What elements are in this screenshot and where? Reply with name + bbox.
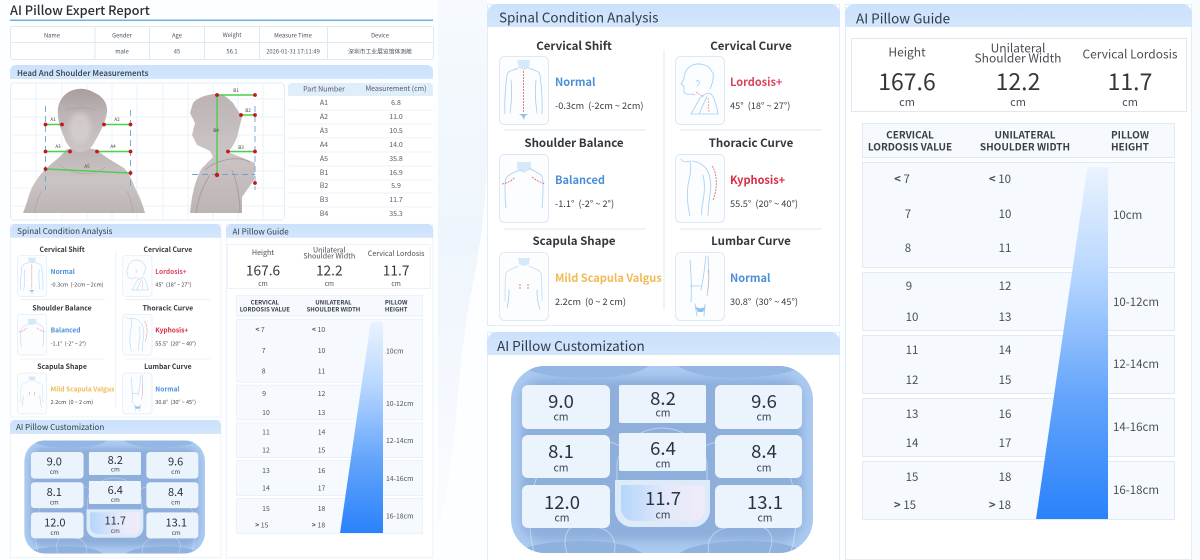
table: part measurements: 5.9 (391, 181, 401, 191)
panel: AI pillow guide, small: PILLOW (385, 297, 408, 307)
table: pillow height guide: 7 (905, 206, 911, 222)
panel: AI pillow customization, small: AI Pillow Customization (16, 422, 104, 433)
metric: scapula shape: Mild Scapula Valgus (555, 270, 662, 286)
summary: height, shoulder width, lordosis (852, 38, 1186, 112)
metric: scapula shape (500, 233, 662, 320)
panel: AI pillow guide, small: Shoulder Width (303, 251, 355, 261)
panel: AI pillow guide, small: 11 (318, 365, 326, 375)
panel: AI pillow guide, small: AI Pillow Guide (233, 227, 289, 238)
panel: AI pillow guide, small: 17 (318, 482, 326, 492)
table: pillow height guide: 13 (999, 309, 1011, 325)
table: part measurements: 35.8 (389, 154, 403, 164)
pillow diagram: cm (655, 456, 671, 472)
summary: height, shoulder width, lordosis: Unilateral (991, 40, 1045, 56)
panel: AI pillow guide, small: 12-14cm (386, 435, 413, 445)
panel: AI pillow guide, small: 11 (262, 427, 270, 437)
table: subject info: Name (44, 30, 60, 40)
panel: AI pillow guide, small: LORDOSIS VALUE (240, 305, 290, 314)
table: pillow height guide: 10-12cm (1113, 294, 1159, 310)
table: subject info: Gender (112, 30, 133, 40)
table: pillow height guide: 12 (906, 372, 918, 388)
table: pillow height guide: UNILATERAL (995, 126, 1056, 142)
panel: AI pillow customization, large (487, 332, 840, 560)
table: pillow height guide: 12 (999, 278, 1011, 294)
figure: side scan (190, 94, 255, 213)
panel: AI pillow customization, small: cm (50, 467, 59, 476)
panel: AI pillow guide, small: UNILATERAL (315, 297, 352, 307)
table: pillow height guide: > 15 (894, 497, 916, 513)
summary: height, shoulder width, lordosis: 167.6 (878, 63, 936, 97)
panel: AI pillow guide, small: 10-12cm (386, 398, 413, 408)
metric: cervical shift: Normal (555, 74, 596, 90)
pillow diagram: 13.1 (747, 489, 783, 515)
panel: AI pillow customization, small: 9.0 (47, 454, 62, 470)
table: part measurements: B4 (320, 209, 328, 219)
table: part measurements: 6.8 (391, 98, 401, 108)
table: subject info: Weight (223, 30, 242, 39)
panel: AI pillow customization, small: 13.1 (166, 515, 187, 531)
measurement lines: A1 (50, 117, 56, 123)
panel: AI pillow customization, small: 9.6 (168, 454, 183, 470)
summary: height, shoulder width, lordosis: cm (899, 94, 915, 110)
panel: AI pillow guide, small: Height (252, 248, 274, 258)
summary: height, shoulder width, lordosis: Cervical Lordosis (1082, 46, 1178, 62)
panel: AI pillow guide, small: Cervical Lordosis (368, 249, 425, 259)
panel: AI pillow customization, small: 8.1 (47, 484, 62, 500)
pillow diagram: 6.4 (650, 435, 676, 461)
panel: spinal condition analysis, small: Kyphosis+ (155, 325, 188, 335)
panel: AI pillow guide, small: 13 (262, 465, 270, 475)
metric: shoulder balance: Balanced (555, 172, 605, 188)
panel: AI pillow guide, small: SHOULDER WIDTH (307, 305, 360, 314)
panel: AI pillow customization, small: 6.4 (108, 482, 123, 498)
pillow diagram: cm (756, 410, 772, 424)
metric: cervical shift: Cervical Shift (536, 38, 612, 54)
panel: AI pillow guide, small: 14 (262, 482, 270, 492)
panel: AI pillow guide, small: 11.7 (383, 260, 409, 280)
panel: AI pillow guide, small: cm (258, 278, 268, 288)
table: pillow height guide: 10 (906, 309, 918, 325)
panel: AI pillow guide, small: 18 (318, 503, 326, 513)
panel: 3D scan grid (10, 83, 284, 220)
table: pillow height guide: < 10 (989, 171, 1011, 187)
metric: scapula shape: Scapula Shape (532, 233, 616, 249)
measurement lines: A5 (84, 164, 90, 170)
table: part measurements: A3 (320, 126, 328, 136)
panel: spinal condition analysis, small: Thoracic Curve (143, 302, 193, 312)
metric: cervical shift: -0.3cm (-2cm ~ 2cm) (555, 98, 643, 112)
table: part measurements (288, 83, 433, 220)
summary: height, shoulder width, lordosis: cm (1122, 94, 1138, 110)
table: subject info (10, 26, 434, 60)
title: AI Pillow Expert Report (10, 0, 150, 19)
table: pillow height guide (862, 124, 1174, 520)
table: pillow height guide: 12-14cm (1113, 356, 1159, 372)
measurement lines: A2 (114, 117, 120, 123)
heading: head and shoulder measurements: Head And Shoulder Measurements (17, 68, 149, 79)
panel: AI pillow guide, small: Unilateral (313, 245, 346, 255)
measurement lines: B2 (245, 108, 251, 114)
panel: spinal condition analysis, small: 55.5° (20° ~ 40°) (155, 339, 196, 347)
panel: AI pillow guide, small: 12 (262, 445, 270, 455)
panel: AI pillow guide, small: 7 (262, 345, 266, 355)
panel: spinal condition analysis, small: Normal (155, 383, 179, 393)
panel: spinal condition analysis, small: Lordosis+ (155, 266, 187, 276)
panel: spinal condition analysis, small: Shoulder Balance (32, 302, 92, 312)
measurement lines: B3 (238, 145, 244, 151)
panel: spinal condition analysis, large (487, 4, 840, 326)
table: part measurements: Part Number (303, 84, 345, 94)
table: pillow height guide: 17 (999, 435, 1011, 451)
table: part measurements: B1 (320, 168, 328, 178)
panel: AI pillow customization, small: cm (171, 498, 180, 507)
metric: shoulder balance: Shoulder Balance (524, 135, 624, 151)
panel: AI pillow guide, small: 12.2 (316, 260, 343, 280)
panel: AI pillow guide, small: 12 (318, 388, 326, 398)
table: part measurements: A5 (320, 154, 328, 164)
table: part measurements: A2 (320, 112, 328, 122)
heading: AI pillow customization: AI Pillow Customization (497, 335, 645, 355)
panel: AI pillow guide, small: 167.6 (246, 260, 280, 280)
metric: shoulder balance: -1.1° (-2° ~ 2°) (555, 196, 614, 210)
pillow diagram: cm (553, 460, 569, 476)
summary: height, shoulder width, lordosis: 11.7 (1108, 63, 1152, 97)
measurement lines (44, 88, 257, 190)
panel: AI pillow customization, small: 8.2 (108, 452, 123, 468)
panel: AI pillow customization, small: cm (171, 467, 180, 476)
panel: AI pillow guide, small: < 7 (255, 324, 265, 334)
measurement lines: B1 (233, 88, 239, 94)
table: pillow height guide: 13 (906, 406, 918, 422)
table: pillow height guide: > 18 (989, 497, 1011, 513)
table: part measurements: Measurement (cm) (365, 84, 427, 94)
panel: AI pillow customization, small (10, 420, 221, 557)
measurement lines: B4 (213, 128, 219, 134)
panel: spinal condition analysis, small: Mild Scapula Valgus (51, 383, 115, 393)
metric: lumbar curve: Lumbar Curve (711, 233, 791, 249)
table: pillow height guide: 16 (999, 406, 1011, 422)
panel: AI pillow customization, small: 12.0 (44, 515, 66, 531)
table: pillow height guide: 15 (999, 372, 1011, 388)
table: pillow height guide: LORDOSIS VALUE (868, 138, 952, 154)
table: part measurements: A1 (320, 98, 328, 108)
table: subject info: Device (371, 30, 389, 40)
panel: AI pillow guide, small: 15 (262, 503, 270, 513)
table: pillow height guide: 14 (906, 435, 919, 451)
metric: cervical curve: Cervical Curve (710, 38, 792, 54)
pillow diagram: cm (553, 410, 569, 424)
metric: cervical curve (676, 38, 792, 124)
panel: AI pillow guide, small: 8 (262, 365, 266, 375)
heading: AI pillow guide: AI Pillow Guide (856, 8, 950, 28)
panel: spinal condition analysis, small: -1.1° (-2° ~ 2°) (51, 339, 86, 347)
table: subject info: 深圳市工业展览馆体测舱 (348, 46, 412, 56)
panel: spinal condition analysis, small (10, 224, 221, 417)
metric: cervical curve: Lordosis+ (730, 74, 783, 90)
table: part measurements: 14.0 (389, 140, 403, 150)
panel: AI pillow customization, small: cm (172, 528, 181, 537)
table: pillow height guide: 14 (999, 342, 1012, 358)
metric: thoracic curve: Kyphosis+ (730, 172, 786, 188)
panel: AI pillow guide, small: cm (391, 278, 401, 288)
panel: spinal condition analysis, small: 30.8° (30° ~ 45°) (155, 398, 196, 406)
panel: AI pillow guide, small (226, 224, 433, 557)
table: pillow height guide: 11 (999, 240, 1011, 256)
heading: spinal condition analysis (487, 4, 840, 27)
heading: AI pillow guide (845, 4, 1192, 28)
table: part measurements: 35.3 (389, 209, 403, 219)
table: pillow height guide: 8 (905, 240, 911, 256)
table: pillow height guide: < 7 (894, 171, 910, 187)
panel: AI pillow guide, small: cm (325, 278, 334, 288)
table: pillow height guide: CERVICAL (886, 126, 934, 142)
metric: thoracic curve: Thoracic Curve (709, 135, 794, 151)
heading: spinal condition analysis: Spinal Condition Analysis (499, 6, 658, 26)
table: pillow height guide: 15 (906, 469, 918, 485)
panel: AI pillow guide, small: HEIGHT (385, 305, 408, 314)
metric: lumbar curve (676, 233, 798, 320)
panel: spinal condition analysis, small: -0.3cm (-2cm ~ 2cm) (51, 281, 104, 289)
table: part measurements: 11.0 (389, 112, 403, 122)
panel: spinal condition analysis, small: Cervical Shift (39, 244, 85, 254)
panel: spinal condition analysis, small: Lumbar Curve (144, 361, 192, 371)
panel: spinal condition analysis, small: Normal (51, 266, 75, 276)
table: subject info: 56.1 (226, 46, 238, 56)
table: pillow height guide: 16-18cm (1113, 482, 1159, 498)
table: subject info: Measure Time (274, 30, 312, 40)
panel: AI pillow guide, small: 10 (318, 345, 326, 355)
summary: height, shoulder width, lordosis: Shoulder Width (975, 50, 1061, 66)
pillow diagram: cm (757, 510, 773, 526)
metric: cervical curve: 45° (18° ~ 27°) (730, 98, 790, 112)
pillow diagram: 8.4 (751, 438, 777, 464)
panel: AI pillow guide, small: 16 (318, 465, 326, 475)
table: pillow height guide: PILLOW (1111, 126, 1149, 142)
pillow diagram: 12.0 (544, 489, 580, 515)
table: pillow height guide: 10 (999, 206, 1011, 222)
metric: scapula shape: 2.2cm (0 ~ 2 cm) (555, 294, 626, 308)
panel: AI pillow guide, large (845, 4, 1192, 560)
panel: AI pillow customization, small: cm (111, 464, 120, 473)
pillow diagram: cm (655, 406, 671, 420)
pillow diagram: cm (756, 460, 772, 476)
panel: AI pillow customization, small: cm (111, 526, 120, 535)
metric: lumbar curve: 30.8° (30° ~ 45°) (730, 294, 798, 308)
panel: AI pillow guide, small: 14 (318, 427, 326, 437)
panel: spinal condition analysis, small: 2.2cm (0 ~ 2 cm) (51, 398, 93, 406)
table: part measurements: 11.7 (389, 195, 403, 205)
metric: shoulder balance (500, 135, 624, 222)
panel: AI pillow customization, small: cm (50, 498, 59, 507)
pillow diagram: cm (554, 510, 570, 526)
table: part measurements: A4 (320, 140, 328, 150)
pillow diagram: 9.0 (548, 388, 574, 414)
table: pillow height guide: 11 (906, 342, 918, 358)
metric: cervical shift (500, 38, 643, 124)
table: pillow height guide: 10cm (1113, 207, 1142, 223)
measurement lines: A4 (110, 144, 116, 150)
panel: AI pillow guide, small: 10 (262, 407, 270, 417)
pillow diagram (511, 366, 813, 553)
table: subject info: Age (172, 30, 182, 40)
pillow diagram: cm (655, 508, 671, 522)
heading: AI pillow customization (487, 332, 840, 355)
panel: AI pillow guide, small: CERVICAL (251, 297, 280, 307)
measurement lines: A3 (55, 144, 61, 150)
panel: spinal condition analysis, small: Cervical Curve (144, 244, 192, 254)
panel: AI pillow customization, small: cm (111, 495, 120, 504)
panel: AI pillow customization, small: 11.7 (105, 512, 126, 528)
panel: spinal condition analysis, small: 45° (18° ~ 27°) (155, 281, 192, 289)
pillow diagram: 8.1 (548, 438, 574, 464)
metric: lumbar curve: Normal (730, 270, 771, 286)
summary: height, shoulder width, lordosis: 12.2 (996, 63, 1040, 97)
panel: spinal condition analysis, small: Spinal Condition Analysis (17, 226, 113, 237)
pillow diagram: 9.6 (751, 388, 777, 414)
figure: front scan (23, 89, 145, 213)
panel: AI pillow guide, small: > 18 (312, 520, 325, 530)
table: pillow height guide: SHOULDER WIDTH (980, 138, 1070, 154)
panel: AI pillow guide, small: 16-18cm (386, 511, 413, 521)
pillow diagram: 11.7 (645, 485, 681, 511)
panel: AI pillow customization, small: cm (50, 528, 60, 537)
panel: AI pillow guide, small: > 15 (255, 520, 269, 530)
panel: left report page (10, 0, 434, 220)
pillow diagram: 8.2 (650, 385, 676, 411)
table: part measurements: B2 (320, 181, 328, 191)
panel: AI pillow guide, small: 9 (262, 388, 266, 398)
summary: height, shoulder width, lordosis: cm (1010, 94, 1026, 110)
panel: AI pillow customization, small: 8.4 (168, 484, 183, 500)
panel: AI pillow guide, small: < 10 (312, 324, 325, 334)
panel: spinal condition analysis, small: Scapula Shape (37, 361, 87, 371)
panel: AI pillow guide, small: 10cm (386, 346, 403, 356)
panel: spinal condition analysis, small: Balanced (51, 325, 80, 335)
table: pillow height guide: 14-16cm (1113, 419, 1159, 435)
table: part measurements: 10.5 (389, 126, 403, 136)
heading: head and shoulder measurements (10, 65, 433, 79)
title rule (10, 20, 433, 21)
panel: AI pillow guide, small: 14-16cm (386, 473, 413, 483)
table: subject info: 45 (174, 46, 180, 56)
metric: thoracic curve (676, 135, 798, 222)
table: pillow height guide: 18 (999, 469, 1011, 485)
table: part measurements: B3 (320, 195, 328, 205)
table: pillow height guide: HEIGHT (1111, 138, 1149, 154)
table: subject info: male (115, 46, 129, 56)
table: pillow height guide: 9 (906, 278, 912, 294)
panel: AI pillow guide, small: 15 (318, 445, 326, 455)
panel: AI pillow guide, small: 13 (318, 407, 326, 417)
metric: thoracic curve: 55.5° (20° ~ 40°) (730, 196, 798, 210)
table: subject info: 2026-01-31 17:11:49 (266, 46, 320, 56)
summary: height, shoulder width, lordosis: Height (888, 44, 926, 60)
table: part measurements: 16.9 (389, 168, 403, 178)
